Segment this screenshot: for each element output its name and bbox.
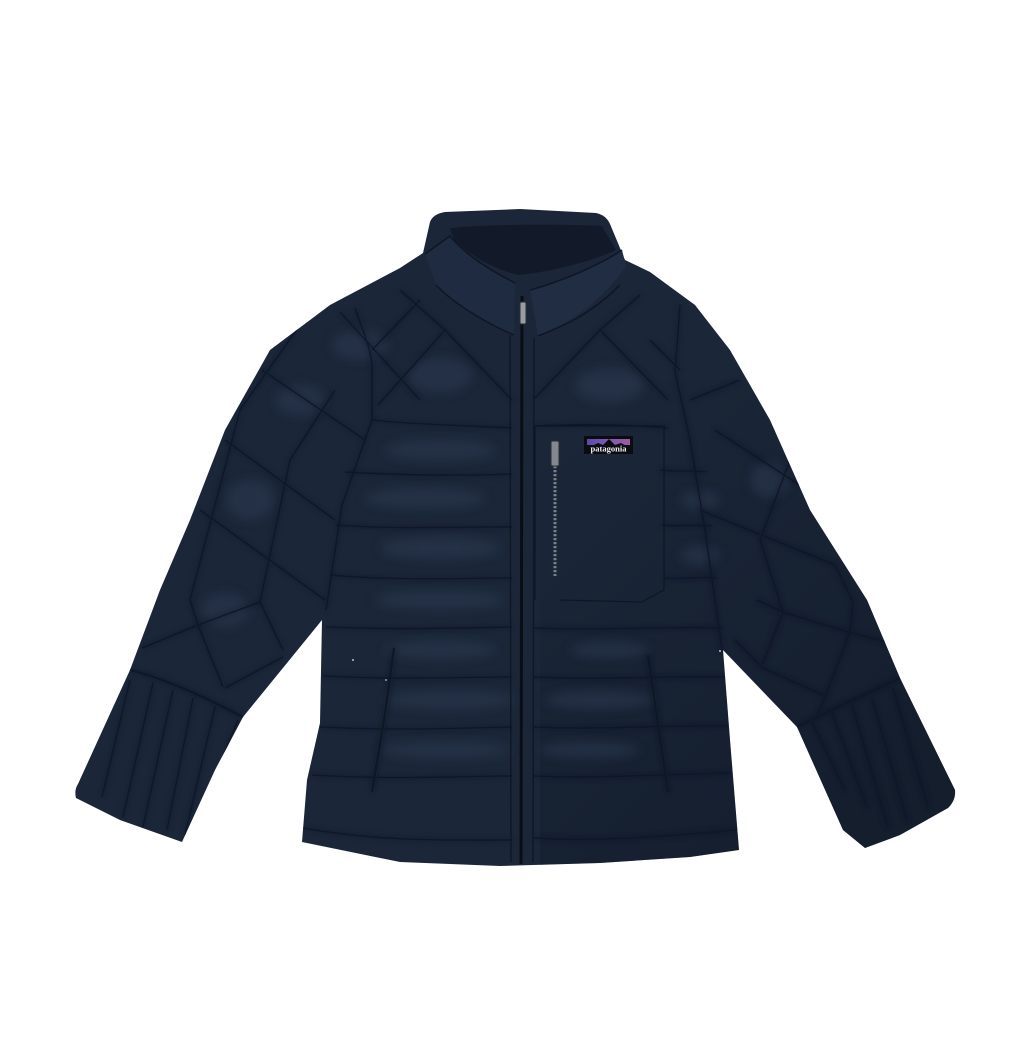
chest diamond quilting: [340, 290, 680, 405]
collar inner lining: [450, 225, 616, 275]
armhole seams: [326, 308, 372, 610]
pocket zipper pull: [551, 441, 559, 466]
chest pocket: [534, 426, 664, 602]
fabric shading: [188, 334, 956, 865]
zipper pull: [520, 302, 526, 324]
collar front fold: [425, 236, 515, 335]
logo mountains: [590, 439, 628, 447]
logo wordmark: patagonia: [591, 444, 627, 454]
left sleeve quilting: [142, 325, 365, 688]
placket lines: [510, 335, 534, 862]
hand pockets: [372, 648, 668, 792]
quilting seams: [102, 290, 928, 840]
center front zipper and placket: [510, 296, 534, 864]
fabric specks: [352, 650, 721, 681]
seam shadow: [188, 331, 788, 830]
logo colour band: [587, 439, 630, 445]
patagonia logo label: [584, 436, 633, 454]
zipper tape: [521, 296, 522, 864]
pocket zipper teeth: [554, 466, 556, 576]
pocket outline: [534, 426, 664, 602]
yoke and body baffle lines: [372, 420, 668, 428]
right sleeve quilting: [690, 380, 887, 717]
collar: [425, 225, 626, 336]
product photo: navy quilted jacket: [75, 209, 956, 866]
jacket silhouette: [75, 209, 955, 866]
